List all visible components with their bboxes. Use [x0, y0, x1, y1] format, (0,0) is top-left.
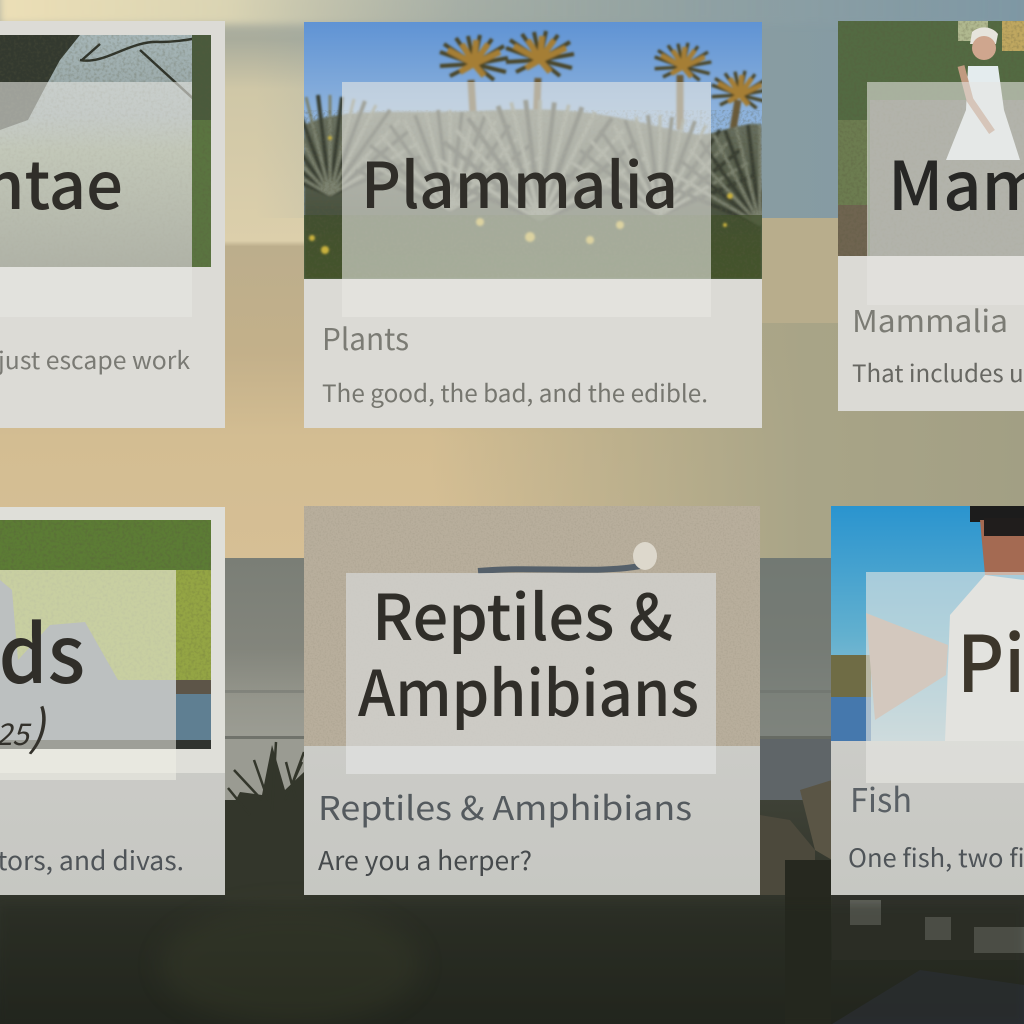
overlay title panel [0, 82, 192, 317]
card base [838, 21, 1024, 411]
category name: Fish [850, 774, 912, 822]
photo: tree shade and lawn [0, 35, 211, 267]
photo: stucco wall with lizard [304, 506, 760, 746]
card base [304, 506, 760, 895]
heading: Amphibians [358, 644, 699, 735]
category name: Mammalia [852, 297, 1008, 341]
heading: Reptiles & [372, 568, 673, 659]
top frame strip [0, 507, 225, 773]
card base [0, 21, 225, 428]
photo: grass and water [0, 520, 211, 749]
panel: Pisces card [831, 505, 1024, 895]
card base [831, 506, 1024, 895]
heading [358, 568, 699, 735]
overlay title panel [342, 82, 711, 317]
panel: Plantae card [0, 21, 225, 428]
description: just escape work [0, 341, 190, 376]
card base [0, 507, 225, 895]
heading: Plammalia [361, 136, 678, 227]
photo: woman in white dress [838, 21, 1024, 256]
overlay title panel [346, 573, 716, 774]
panel: Plammalia card [304, 22, 762, 428]
panel: Reptiles & Amphibians card [304, 506, 760, 895]
panel: Mammalia card [838, 21, 1024, 411]
card base [304, 22, 762, 428]
category name: Plants [322, 315, 409, 359]
category name: Reptiles & Amphibians [318, 782, 692, 830]
overlay title panel [866, 572, 1024, 783]
overlay title panel [0, 570, 176, 780]
panel: Birds card [0, 507, 225, 895]
description: The good, the bad, and the edible. [322, 374, 708, 409]
photo: palms under blue sky [304, 22, 762, 279]
description: Are you a herper? [318, 841, 532, 878]
overlay title panel [867, 82, 1024, 305]
photo: fisherman holding redfish [831, 505, 1024, 741]
